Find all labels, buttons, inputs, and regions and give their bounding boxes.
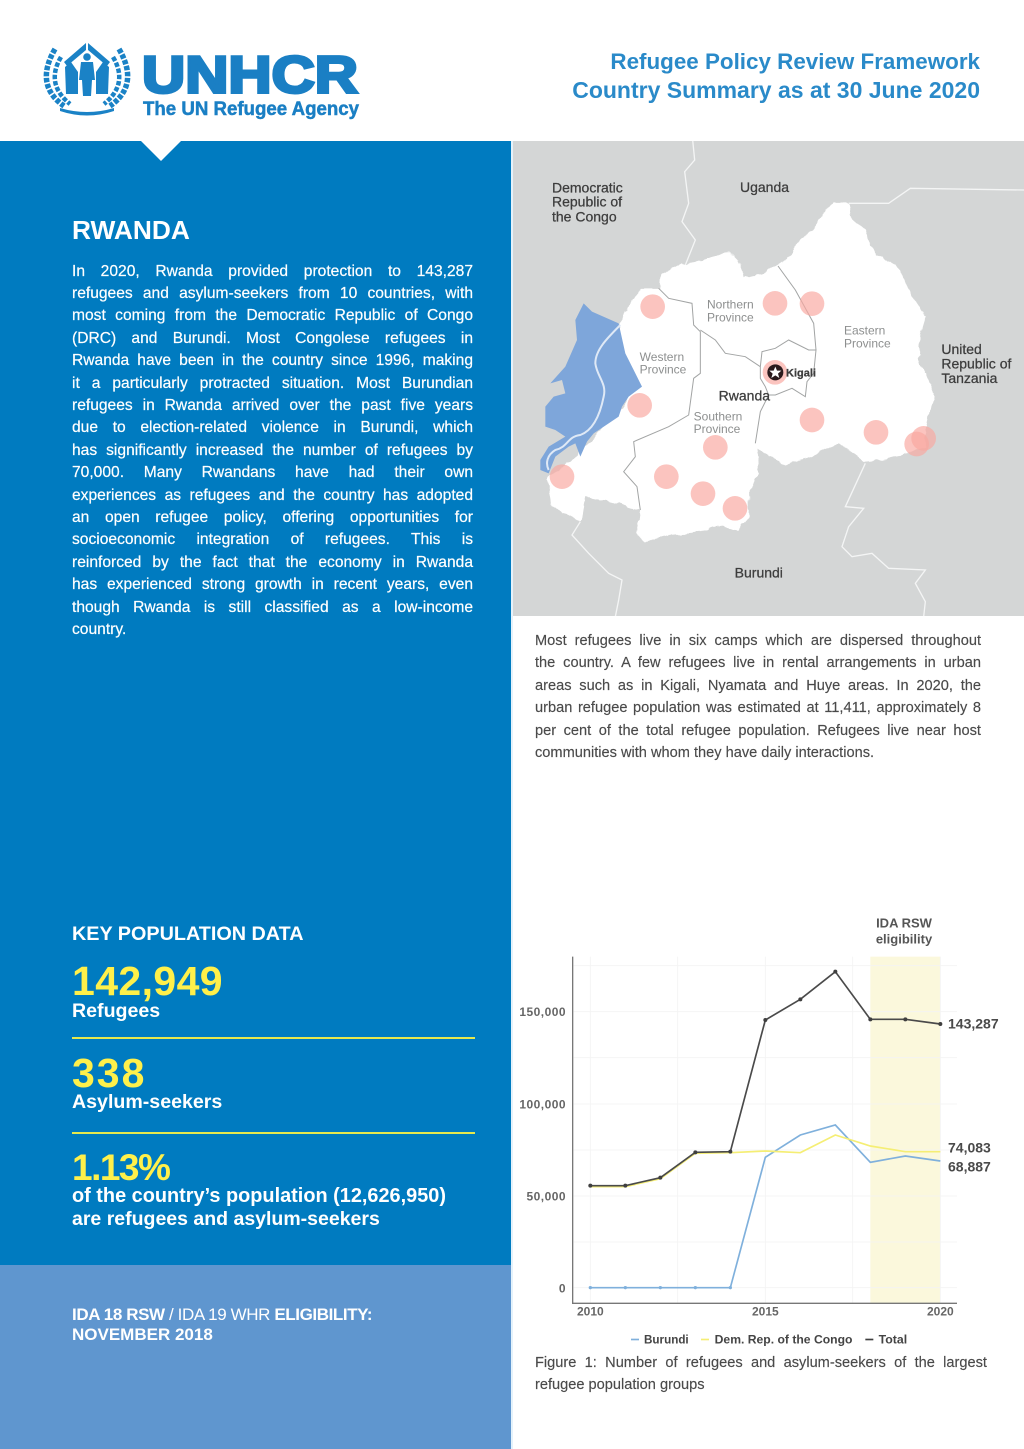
text block: where refugees live: Most refugees live in six camps which are dispersed throughout — [535, 633, 981, 649]
panel: blue left column — [0, 141, 511, 1265]
chart legend: Burundi — [644, 1334, 689, 1347]
country labels: Burundi — [735, 564, 783, 580]
band label: IDA RSW — [876, 915, 933, 930]
text block: where refugees live: the country. A few refugees live in rental arrangements in urban — [535, 655, 981, 671]
figure caption: refugee population groups — [535, 1377, 705, 1393]
map of Rwanda — [513, 141, 1024, 616]
neighbouring country borders — [572, 140, 1024, 617]
text block: country overview: refugees and asylum-seekers from 10 countries, with — [72, 285, 473, 302]
x axis labels: 2020 — [927, 1305, 954, 1319]
tagline: The UN Refugee Agency — [143, 99, 359, 120]
province labels: Southern — [694, 409, 742, 423]
country labels: the Congo — [552, 208, 617, 224]
header title: Refugee Policy Review Framework — [610, 49, 980, 74]
label — [72, 1185, 446, 1230]
series: Dem. Rep. of the Congo — [590, 1135, 940, 1187]
band label — [876, 915, 933, 947]
text block: country overview: an open refugee policy, offering opportunities for — [72, 509, 473, 526]
text block: country overview: refugees in Rwanda arrived over the past five years — [72, 397, 473, 414]
text block: country overview: it a particularly protracted situation. Most Burundian — [72, 375, 473, 392]
province labels: Province — [844, 336, 891, 350]
band label: eligibility — [876, 932, 933, 947]
stat: refugees — [72, 958, 223, 1022]
panel: eligibility band — [0, 1265, 511, 1449]
text block: where refugees live — [535, 633, 981, 761]
Rwanda territory — [547, 203, 935, 542]
end value labels: 68,887 — [948, 1159, 991, 1175]
label: of the country’s population (12,626,950) — [72, 1185, 446, 1207]
province labels: Province — [707, 311, 754, 325]
y axis labels: 50,000 — [526, 1190, 566, 1204]
number: 1.13% — [72, 1147, 169, 1188]
country labels: Republic of — [941, 356, 1011, 372]
heading: key population data: KEY POPULATION DATA — [72, 923, 304, 945]
country labels: Rwanda — [719, 388, 770, 404]
label: Refugees — [72, 1000, 160, 1022]
series: Burundi — [589, 1125, 940, 1289]
province labels: Eastern — [844, 324, 885, 338]
line chart: refugees by origin — [519, 915, 999, 1347]
text block: country overview: 70,000. Many Rwandans have had their own — [72, 464, 473, 481]
text block: country overview: due to election-related violence in Burundi, which — [72, 419, 473, 436]
text block: country overview: socioeconomic integration of refugees. This is — [72, 531, 473, 548]
number: 142,949 — [72, 958, 223, 1004]
Lake Kivu — [540, 303, 642, 473]
number: 338 — [72, 1050, 146, 1096]
end value labels — [948, 1015, 999, 1175]
country labels: Uganda — [740, 179, 789, 195]
eligibility note: NOVEMBER 2018 — [72, 1325, 213, 1344]
stat: asylum-seekers — [72, 1050, 222, 1113]
chart legend: Total — [879, 1333, 907, 1347]
heading: Rwanda: RWANDA — [72, 215, 190, 245]
text block: country overview: has significantly increased the number of refugees by — [72, 442, 473, 459]
text block: country overview: country. — [72, 621, 126, 638]
figure caption — [535, 1355, 987, 1393]
text block: country overview — [72, 263, 474, 638]
text block: country overview: reinforced by the fact that the economy in Rwanda — [72, 554, 473, 571]
end value labels: 74,083 — [948, 1140, 991, 1156]
icon: UNHCR emblem — [46, 43, 128, 116]
wordmark: UNHCR — [142, 46, 358, 104]
icon: Kigali capital star — [767, 364, 783, 380]
y axis labels: 0 — [559, 1281, 566, 1295]
refugee camp markers — [550, 291, 936, 521]
province labels — [640, 298, 891, 436]
country labels: Kigali — [786, 368, 816, 380]
text block: where refugees live: per cent of the total refugee population. Refugees live near host — [535, 723, 981, 739]
province labels: Province — [640, 362, 687, 376]
country labels: Tanzania — [941, 370, 998, 386]
x axis labels — [577, 1305, 954, 1319]
chart legend — [631, 1333, 907, 1347]
end value labels: 143,287 — [948, 1015, 999, 1031]
text block: country overview: experiences as refugees and the country has adopted — [72, 487, 473, 504]
country labels: United — [941, 341, 982, 357]
series: Total — [588, 970, 942, 1188]
text block: country overview: has experienced strong growth in recent years, even — [72, 576, 473, 593]
text block: where refugees live: urban refugee population was estimated at 11,411, approximately 8 — [535, 700, 981, 716]
province labels: Province — [694, 422, 741, 436]
eligibility note — [72, 1305, 372, 1344]
text block: country overview: though Rwanda is still classified as a low-income — [72, 599, 473, 616]
text block: where refugees live: areas such as in Kigali, Nyamata and Huye areas. In 2020, the — [535, 678, 981, 694]
chart legend: Dem. Rep. of the Congo — [715, 1333, 852, 1347]
country labels: Democratic — [552, 179, 623, 195]
header title: Country Summary as at 30 June 2020 — [572, 77, 980, 103]
x axis labels: 2015 — [752, 1305, 779, 1319]
header title — [572, 49, 980, 103]
text block: country overview: most coming from the Democratic Republic of Congo — [72, 307, 473, 324]
province labels: Northern — [707, 298, 754, 312]
label: Asylum-seekers — [72, 1091, 222, 1113]
province labels: Western — [640, 350, 684, 364]
eligibility note: IDA 18 RSW / IDA 19 WHR ELIGIBILITY: — [72, 1305, 372, 1324]
stat: share of population — [72, 1147, 446, 1230]
y axis labels: 100,000 — [519, 1097, 566, 1111]
y axis labels — [519, 1005, 566, 1295]
icon: header pointer — [141, 141, 181, 161]
text block: country overview: Rwanda have been in the country since 1996, making — [72, 352, 473, 369]
province borders — [624, 266, 816, 510]
text block: where refugees live: communities with whom they have daily interactions. — [535, 745, 874, 761]
logo: UNHCR — [44, 43, 360, 120]
figure caption: Figure 1: Number of refugees and asylum-seekers of the largest — [535, 1355, 987, 1371]
country labels: Republic of — [552, 194, 622, 210]
x axis labels: 2010 — [577, 1305, 604, 1319]
y axis labels: 150,000 — [519, 1005, 566, 1019]
text block: country overview: (DRC) and Burundi. Most Congolese refugees in — [72, 330, 473, 347]
eligibility band — [870, 957, 940, 1303]
text block: country overview: In 2020, Rwanda provided protection to 143,287 — [72, 263, 473, 280]
country labels — [552, 179, 1011, 580]
label: are refugees and asylum-seekers — [72, 1208, 380, 1230]
